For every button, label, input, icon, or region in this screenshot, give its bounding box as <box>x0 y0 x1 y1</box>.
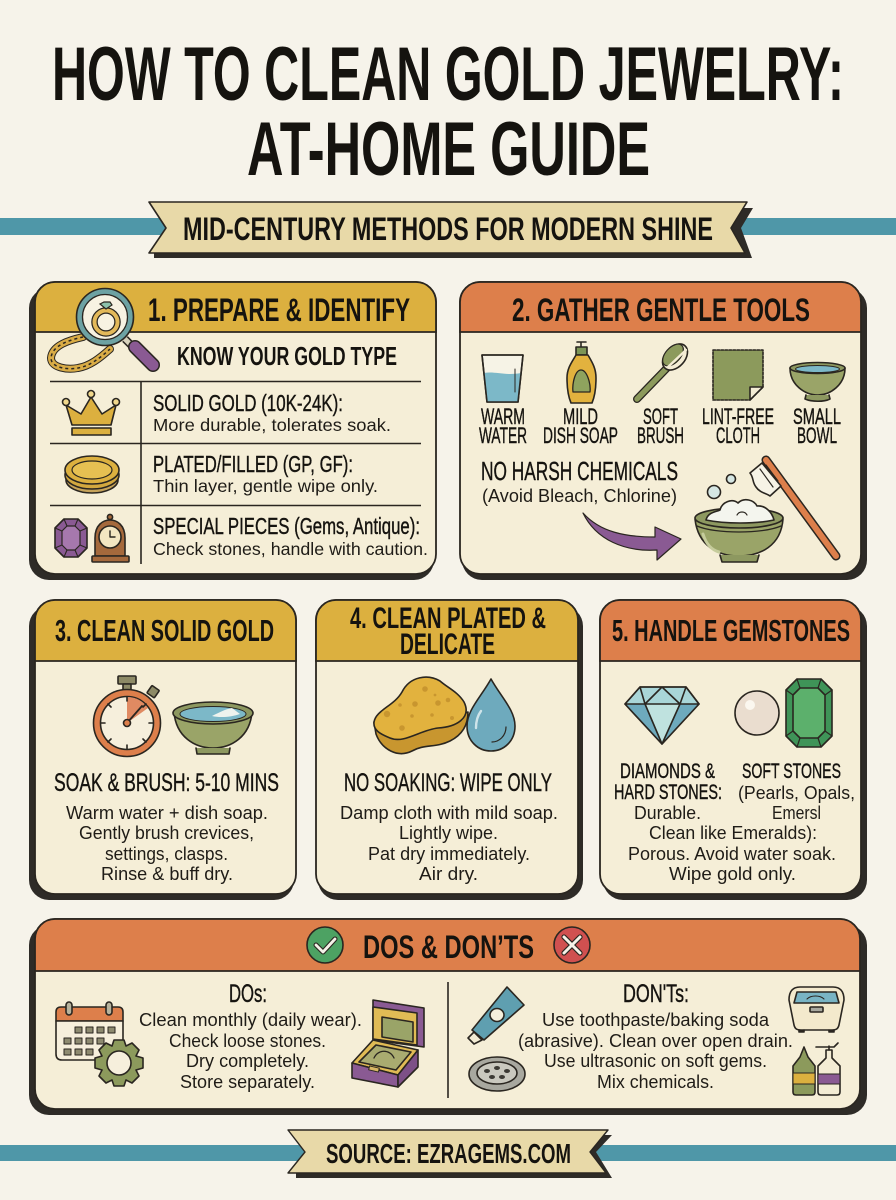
don'ts text: Mix chemicals. <box>597 1072 714 1092</box>
don'ts text: (abrasive). Clean over open drain. <box>518 1031 793 1051</box>
panel 4: clean plated and delicate <box>316 600 583 900</box>
body text: plated steps: Pat dry immediately. <box>368 844 530 864</box>
tool labels: LINT-FREE <box>702 404 774 429</box>
icon: purple gem <box>55 519 87 557</box>
heading 3: 3. CLEAN SOLID GOLD <box>55 613 274 648</box>
title: AT-HOME GUIDE <box>247 107 650 192</box>
gemstone text: HARD STONES: <box>614 781 722 804</box>
row text: solid gold <box>153 390 391 435</box>
subtitle ribbon: MID-CENTURY METHODS FOR MODERN SHINE <box>183 211 713 247</box>
panel 2: gather gentle tools <box>460 282 867 580</box>
gemstone text: DIAMONDS & <box>620 760 715 783</box>
subtitle ribbon <box>0 202 896 258</box>
gemstone text: (Pearls, Opals, <box>738 783 855 803</box>
icon: water drop <box>467 679 515 751</box>
icon: stacked coins <box>65 456 119 493</box>
row text: plated and filled: PLATED/FILLED (GP, GF): <box>153 451 353 477</box>
tool labels: BOWL <box>797 423 837 448</box>
tool labels: WATER <box>479 423 527 448</box>
icon: glass of water <box>482 355 523 402</box>
tool labels: WARM <box>481 404 525 429</box>
icon: small bowl <box>790 362 845 401</box>
source ribbon <box>0 1130 896 1178</box>
gemstone text: Emersl <box>772 803 821 823</box>
tool labels: DISH SOAP <box>543 423 618 448</box>
tool labels: BRUSH <box>637 423 684 448</box>
gemstone text <box>614 760 855 884</box>
dos text: Store separately. <box>180 1072 315 1092</box>
body text: solid gold steps: Gently brush crevices, <box>79 823 254 843</box>
icon: ultrasonic cleaner <box>789 987 844 1032</box>
heading 6: DOS & DON’TS <box>363 929 534 965</box>
tool labels: MILD <box>563 404 598 429</box>
gemstone text: SOFT STONES <box>742 760 841 783</box>
icon: calendar with gear <box>56 1002 143 1086</box>
icon: red cross <box>554 927 590 963</box>
row text: solid gold: More durable, tolerates soak. <box>153 415 391 435</box>
icon: dish soap bottle <box>567 342 596 403</box>
row text: solid gold: SOLID GOLD (10K-24K): <box>153 390 343 416</box>
icon: large soapy bowl <box>695 500 783 562</box>
title <box>52 32 844 192</box>
icon: stopwatch <box>94 676 160 756</box>
body text: plated steps: Lightly wipe. <box>399 823 498 843</box>
dos text: Check loose stones. <box>169 1031 326 1051</box>
warning text <box>481 456 678 506</box>
icon: emerald <box>786 679 832 747</box>
panel 3: clean solid gold <box>29 600 296 900</box>
row text: special pieces: SPECIAL PIECES (Gems, Antique): <box>153 513 420 539</box>
don'ts text: DON'Ts: <box>623 980 689 1008</box>
body text: solid gold steps: Rinse & buff dry. <box>101 864 233 884</box>
tool labels: SMALL <box>793 404 841 429</box>
body text: solid gold steps: Warm water + dish soap. <box>66 803 268 823</box>
tool labels <box>479 404 841 448</box>
gemstone text: Durable. <box>634 803 701 823</box>
heading 4: 4. CLEAN PLATED & <box>350 602 546 635</box>
tool labels: CLOTH <box>716 423 760 448</box>
icon: sponge <box>374 677 468 754</box>
icon: soaking bowl <box>173 702 253 754</box>
subheading: know your gold type: KNOW YOUR GOLD TYPE <box>177 341 397 371</box>
tool labels: SOFT <box>643 404 678 429</box>
dos text <box>139 980 362 1092</box>
source ribbon: SOURCE: EZRAGEMS.COM <box>326 1138 571 1169</box>
body text: plated steps: Air dry. <box>419 864 478 884</box>
icon: sink drain <box>469 1057 525 1091</box>
dos text: Clean monthly (daily wear). <box>139 1010 362 1030</box>
gemstone text: Porous. Avoid water soak. <box>628 844 836 864</box>
row text: special pieces: Check stones, handle with caution. <box>153 539 428 559</box>
gemstone text: Clean like Emeralds): <box>649 823 817 843</box>
icon: chemical bottles <box>793 1043 840 1095</box>
arrow: purple curved <box>583 513 681 560</box>
row text: plated and filled: Thin layer, gentle wipe only. <box>153 476 378 496</box>
heading 4: DELICATE <box>400 628 495 661</box>
heading 1: 1. PREPARE & IDENTIFY <box>148 292 410 328</box>
icon: pearl <box>735 691 779 735</box>
body text: plated steps: Damp cloth with mild soap. <box>340 803 558 823</box>
body text: solid gold steps <box>66 803 268 884</box>
icon: soft brush <box>637 339 692 399</box>
icon: green check <box>307 927 343 963</box>
icon: antique clock <box>92 514 129 562</box>
body text: plated steps <box>340 803 558 884</box>
warning text: (Avoid Bleach, Chlorine) <box>482 485 677 506</box>
don'ts text <box>518 980 793 1092</box>
row text: plated and filled <box>153 451 378 496</box>
panel 1: prepare and identify <box>29 282 436 580</box>
icon: magnifying glass with ring <box>76 288 153 365</box>
dos text: Dry completely. <box>186 1051 309 1071</box>
don'ts text: Use ultrasonic on soft gems. <box>544 1051 767 1071</box>
icon: gold chain <box>51 337 110 369</box>
icon: jewelry box <box>352 1000 424 1087</box>
icon: crown <box>62 390 120 435</box>
panel 5: handle gemstones <box>600 600 867 900</box>
icon: bubbles <box>708 474 736 498</box>
dos text: DOs: <box>229 980 267 1008</box>
panel 6: dos and don'ts <box>29 919 867 1115</box>
gemstone text: Wipe gold only. <box>669 864 796 884</box>
body text: solid gold steps: settings, clasps. <box>105 844 228 864</box>
don'ts text: Use toothpaste/baking soda <box>542 1010 770 1030</box>
heading 4 <box>350 602 546 661</box>
subheading: soak and brush: SOAK & BRUSH: 5-10 MINS <box>54 769 279 797</box>
icon: lint-free cloth <box>713 350 763 400</box>
icon: diamond <box>625 687 699 744</box>
subheading: no soaking: NO SOAKING: WIPE ONLY <box>344 769 552 797</box>
icon: toothbrush <box>750 460 836 556</box>
row text: special pieces <box>153 513 428 559</box>
warning text: NO HARSH CHEMICALS <box>481 456 678 486</box>
icon: toothpaste tube <box>468 987 524 1044</box>
